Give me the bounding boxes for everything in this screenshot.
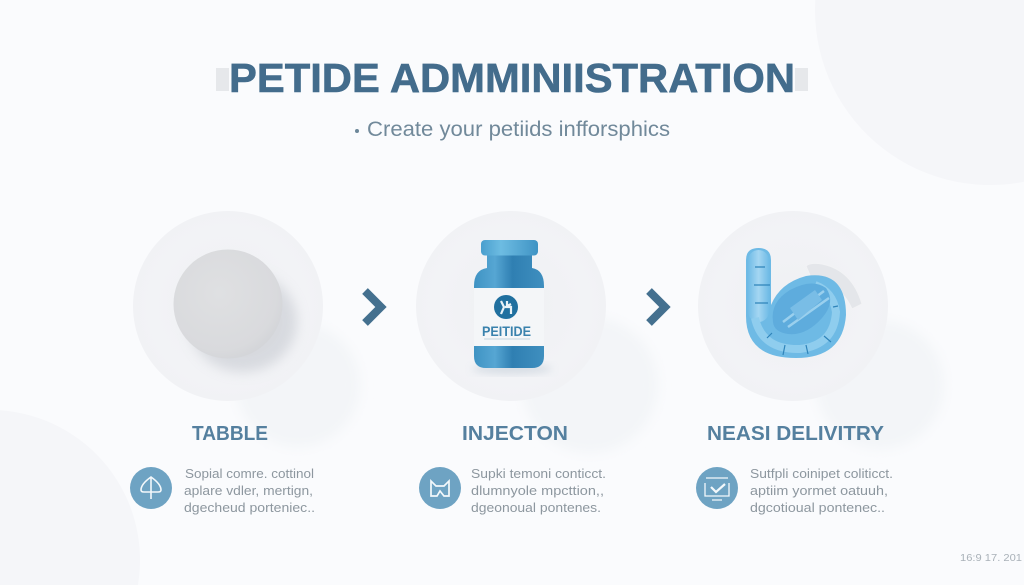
icon: injection badge [419, 467, 461, 509]
icon: nasal delivery badge [696, 467, 738, 509]
text block: tablet: aplare vdler, mertign, [184, 483, 313, 498]
backdrop disc: tablet [133, 211, 323, 401]
arrow: tablet to injection [365, 291, 381, 323]
text block: tablet: dgecheud porteniec.. [184, 500, 315, 515]
backdrop disc: injection [416, 211, 606, 401]
footer timestamp: 16:9 17. 201 [960, 553, 1022, 564]
subtitle: Create your petiids infforsphics [367, 118, 670, 141]
text block: injection: Supki temoni conticct. [471, 466, 606, 481]
soft shadow blob: tablet [236, 323, 360, 447]
heading: injection: INJECTON [462, 423, 568, 445]
decorative corner circle: top right [815, 0, 1024, 185]
panel: nasal delivery [698, 211, 944, 449]
icon: peptide vial [472, 240, 552, 374]
icon: tablet [174, 250, 297, 372]
arrow: injection to nasal delivery [649, 291, 665, 323]
text block: nasal delivery: dgcotioual pontenec.. [750, 500, 885, 515]
heading: tablet: TABBLE [192, 423, 268, 445]
text block: nasal delivery: aptiim yormet oatuuh, [750, 483, 888, 498]
text block: tablet [184, 466, 315, 515]
text block: tablet: Sopial comre. cottinol [185, 466, 314, 481]
soft shadow blob: injection [522, 317, 658, 453]
icon: nasal device [746, 248, 862, 358]
backdrop disc: nasal delivery [698, 211, 888, 401]
panel: tablet [133, 211, 360, 447]
panel: injection [416, 211, 658, 453]
icon: peptide vial: PEITIDE [482, 323, 531, 339]
text block: injection: dgeonoual pontenes. [471, 500, 601, 515]
text block: nasal delivery [750, 466, 893, 515]
decorative corner circle: bottom left [0, 410, 140, 585]
text block: injection [471, 466, 606, 515]
text block: nasal delivery: Sutfpli coinipet coliticct. [750, 466, 893, 481]
heading: nasal delivery: NEASI DELIVITRY [707, 423, 885, 445]
icon: tablet badge [130, 467, 172, 509]
soft shadow blob: nasal delivery [816, 321, 944, 449]
text block: injection: dlumnyole mpcttion,, [471, 483, 604, 498]
title: PETIDE ADMMINIISTRATION [229, 55, 795, 101]
